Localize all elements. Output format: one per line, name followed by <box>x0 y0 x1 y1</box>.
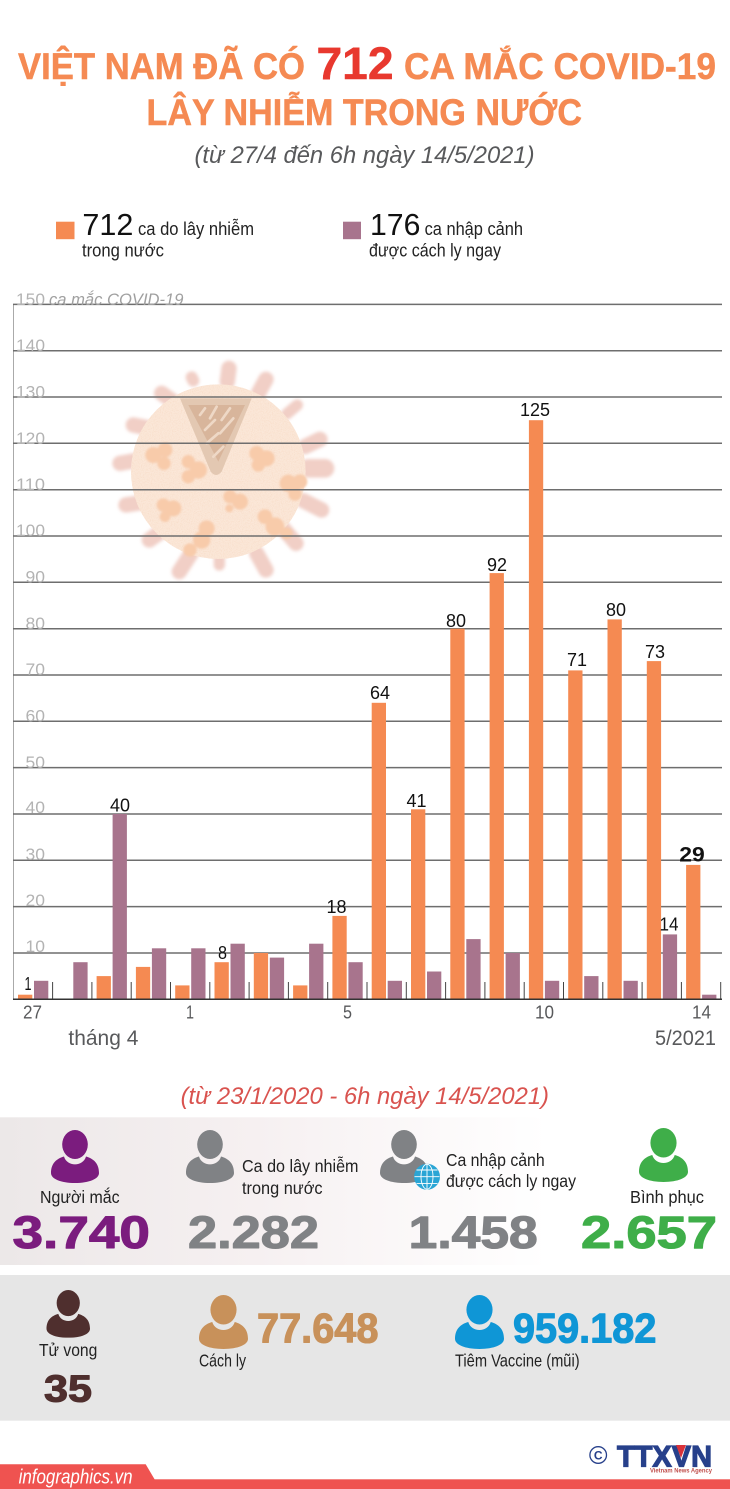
x axis labels: 10 <box>535 1003 554 1023</box>
value labels: 40 <box>110 796 130 816</box>
x axis labels: 5/2021 <box>655 1027 716 1050</box>
logo: TTXVN: Vietnam News Agency <box>650 1468 712 1474</box>
stat: infected <box>12 1130 150 1258</box>
y axis labels: 140 <box>16 336 45 355</box>
y axis line <box>12 304 14 999</box>
value labels: 80 <box>606 600 626 620</box>
title: 712 <box>316 38 394 89</box>
stat: imported <box>380 1130 576 1258</box>
value labels: 1 <box>24 974 32 994</box>
stat: infected: 3.740 <box>12 1207 150 1258</box>
stat: infected: Người mắc <box>40 1186 120 1207</box>
y axis labels: 30 <box>26 845 45 864</box>
stat: recovered <box>581 1128 717 1258</box>
x axis labels: 14 <box>692 1003 711 1023</box>
axis ticks <box>53 982 721 999</box>
stat: domestic: trong nước <box>242 1178 323 1198</box>
x axis labels: 1 <box>186 1003 194 1023</box>
stat: recovered: 2.657 <box>581 1207 717 1258</box>
value labels: 41 <box>406 791 426 811</box>
y axis labels: 110 <box>16 475 45 494</box>
panel: totals <box>0 1117 730 1265</box>
y axis labels: ca mắc COVID-19 <box>49 290 184 309</box>
bar chart <box>13 290 722 1050</box>
stat: quarantine <box>199 1295 378 1371</box>
stat: domestic: Ca do lây nhiễm <box>242 1155 358 1176</box>
legend: imported cases <box>343 207 523 261</box>
y axis labels <box>16 290 184 956</box>
purple bars: imported <box>34 814 716 999</box>
stat: domestic <box>186 1130 358 1258</box>
title: VIỆT NAM ĐÃ CÓ <box>18 45 305 87</box>
y axis labels: 20 <box>26 891 45 910</box>
stat: domestic: 2.282 <box>188 1207 319 1258</box>
title: LÂY NHIỄM TRONG NƯỚC <box>146 91 582 133</box>
y axis labels: 150 <box>16 290 45 309</box>
section date heading: (từ 23/1/2020 - 6h ngày 14/5/2021) <box>181 1083 549 1110</box>
stat: recovered: Bình phục <box>630 1187 704 1207</box>
stat: imported: 1.458 <box>409 1207 538 1258</box>
legend: domestic cases: 712 <box>82 207 133 242</box>
value labels: 125 <box>520 400 550 420</box>
stat: quarantine: Cách ly <box>199 1351 246 1371</box>
value labels: 92 <box>487 555 507 575</box>
value labels <box>24 400 705 994</box>
stat: quarantine: 77.648 <box>257 1305 378 1352</box>
value labels: 8 <box>218 943 227 963</box>
title <box>18 38 716 133</box>
value labels: 29 <box>679 844 705 866</box>
subtitle: (từ 27/4 đến 6h ngày 14/5/2021) <box>194 142 534 169</box>
value labels: 71 <box>567 650 587 670</box>
y axis labels: 40 <box>26 798 45 817</box>
y axis labels: 80 <box>26 614 45 633</box>
y axis labels: 60 <box>26 706 45 726</box>
legend: imported cases: ca nhập cảnh <box>425 219 523 239</box>
legend: domestic cases <box>56 207 254 261</box>
y axis labels: 10 <box>26 937 45 956</box>
x axis labels: 27 <box>23 1003 42 1023</box>
y axis labels: 100 <box>16 521 45 540</box>
legend: domestic cases: ca do lây nhiễm <box>138 218 254 239</box>
value labels: 80 <box>446 611 466 631</box>
value labels: 73 <box>645 642 665 662</box>
x axis labels <box>23 1003 716 1050</box>
virus illustration <box>120 368 325 572</box>
orange bars: domestic <box>18 420 700 999</box>
stat: vaccine: Tiêm Vaccine (mũi) <box>455 1351 580 1371</box>
baseline <box>13 998 722 1000</box>
stat: vaccine: 959.182 <box>513 1305 656 1352</box>
y axis labels: 130 <box>16 382 45 402</box>
logo: TTXVN: TTXVN <box>617 1441 712 1474</box>
y axis labels: 90 <box>26 568 45 586</box>
legend: imported cases: được cách ly ngay <box>369 241 501 261</box>
legend: domestic cases: trong nước <box>82 241 164 261</box>
footer band <box>0 1464 730 1489</box>
y axis labels: 120 <box>16 429 45 448</box>
stat: deaths <box>39 1290 97 1411</box>
y axis labels: 70 <box>26 660 45 679</box>
legend: imported cases: 176 <box>370 207 420 242</box>
logo: TTXVN: C <box>594 1448 603 1462</box>
footer band: infographics.vn <box>19 1466 133 1488</box>
x axis labels: 5 <box>343 1003 352 1023</box>
icon: globe <box>414 1164 440 1190</box>
stat: vaccine <box>455 1295 656 1371</box>
title: CA MẮC COVID-19 <box>404 45 716 87</box>
stat: imported: được cách ly ngay <box>446 1171 576 1191</box>
x axis labels: tháng 4 <box>68 1027 139 1050</box>
value labels: 18 <box>326 897 346 917</box>
stat: deaths: 35 <box>44 1369 92 1411</box>
value labels: 64 <box>370 683 390 703</box>
stat: deaths: Tử vong <box>39 1340 97 1360</box>
stat: imported: Ca nhập cảnh <box>446 1150 545 1170</box>
y axis labels: 50 <box>26 753 45 772</box>
panel: other stats <box>0 1275 730 1421</box>
value labels: 14 <box>660 914 678 934</box>
